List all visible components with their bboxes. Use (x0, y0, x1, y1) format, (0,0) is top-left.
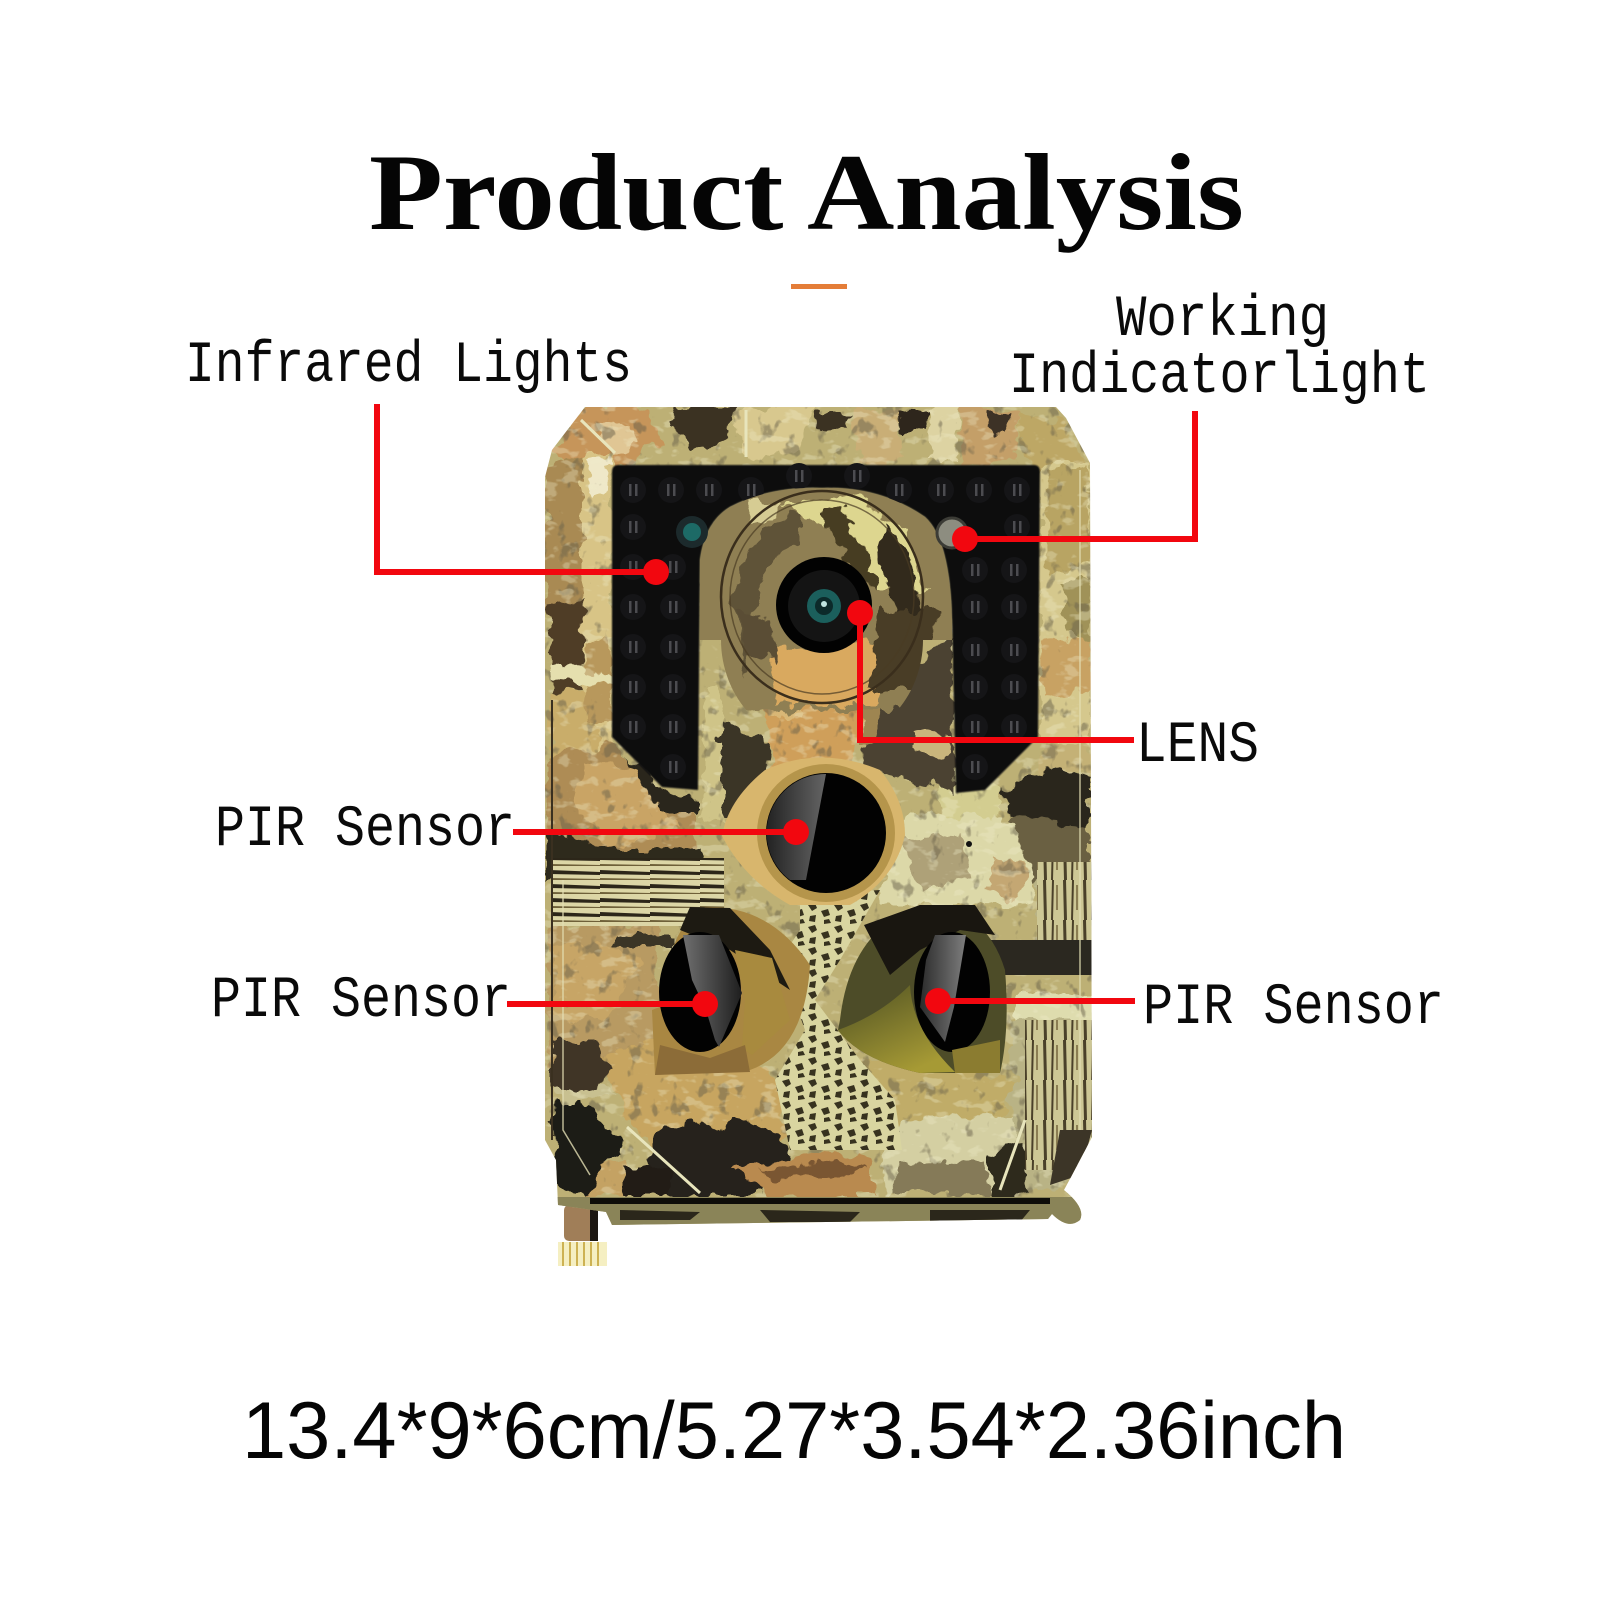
IR LED dots (620, 463, 1030, 780)
working indicator lamp (937, 518, 967, 548)
black infrared LED panel (612, 465, 1040, 793)
callout: left PIR sensor (211, 969, 718, 1034)
dark camouflage accents (546, 407, 1090, 1198)
left PIR sensor (652, 907, 810, 1075)
small teal light sensor (676, 516, 708, 548)
camera product illustration (530, 395, 1110, 1266)
right bark base (1014, 860, 1092, 1195)
right PIR sensor (838, 905, 1007, 1073)
microphone hole (966, 841, 972, 847)
lens housing (695, 480, 957, 710)
camouflage mottling light (545, 407, 1091, 1197)
title: Product Analysis (369, 132, 1244, 253)
central PIR sensor (722, 758, 905, 905)
camouflage base patches (530, 395, 1110, 1235)
callout: left PIR sensor: PIR Sensor (211, 969, 511, 1034)
callout: lens (847, 600, 1259, 779)
callout: right PIR sensor: PIR Sensor (1143, 976, 1444, 1041)
callout: working indicator light: Working (1116, 288, 1329, 353)
bevel and branch lines (552, 410, 1080, 1193)
top band camouflage (552, 407, 1088, 470)
callout: working indicator light (952, 288, 1430, 552)
speckled centre column (775, 890, 902, 1150)
right bark strips (990, 862, 1092, 1185)
callout: top PIR sensor (215, 798, 809, 863)
dimensions text: 13.4*9*6cm/5.27*3.54*2.36inch (242, 1386, 1346, 1476)
left frame camouflage (545, 455, 700, 870)
center camouflage under lens (703, 665, 1040, 905)
camouflage body (530, 395, 1110, 1235)
callout: infrared lights (185, 334, 669, 585)
lower camouflage leaves (548, 925, 1022, 1195)
right frame camouflage (1040, 465, 1090, 770)
orange accent bar (791, 284, 847, 289)
camouflage mottling dark (530, 395, 1110, 1235)
bottom seam strip (558, 1197, 1082, 1225)
antenna connector (558, 1205, 607, 1266)
callout: infrared lights: Infrared Lights (185, 334, 632, 399)
callout: lens: LENS (1136, 714, 1259, 779)
callout: top PIR sensor: PIR Sensor (215, 798, 515, 863)
callout: right PIR sensor (925, 976, 1444, 1041)
left bark stripes (552, 858, 724, 926)
callout: working indicator light: Indicatorlight (1009, 345, 1430, 410)
infographic canvas (190, 153, 1440, 1459)
camera lens (776, 557, 872, 653)
